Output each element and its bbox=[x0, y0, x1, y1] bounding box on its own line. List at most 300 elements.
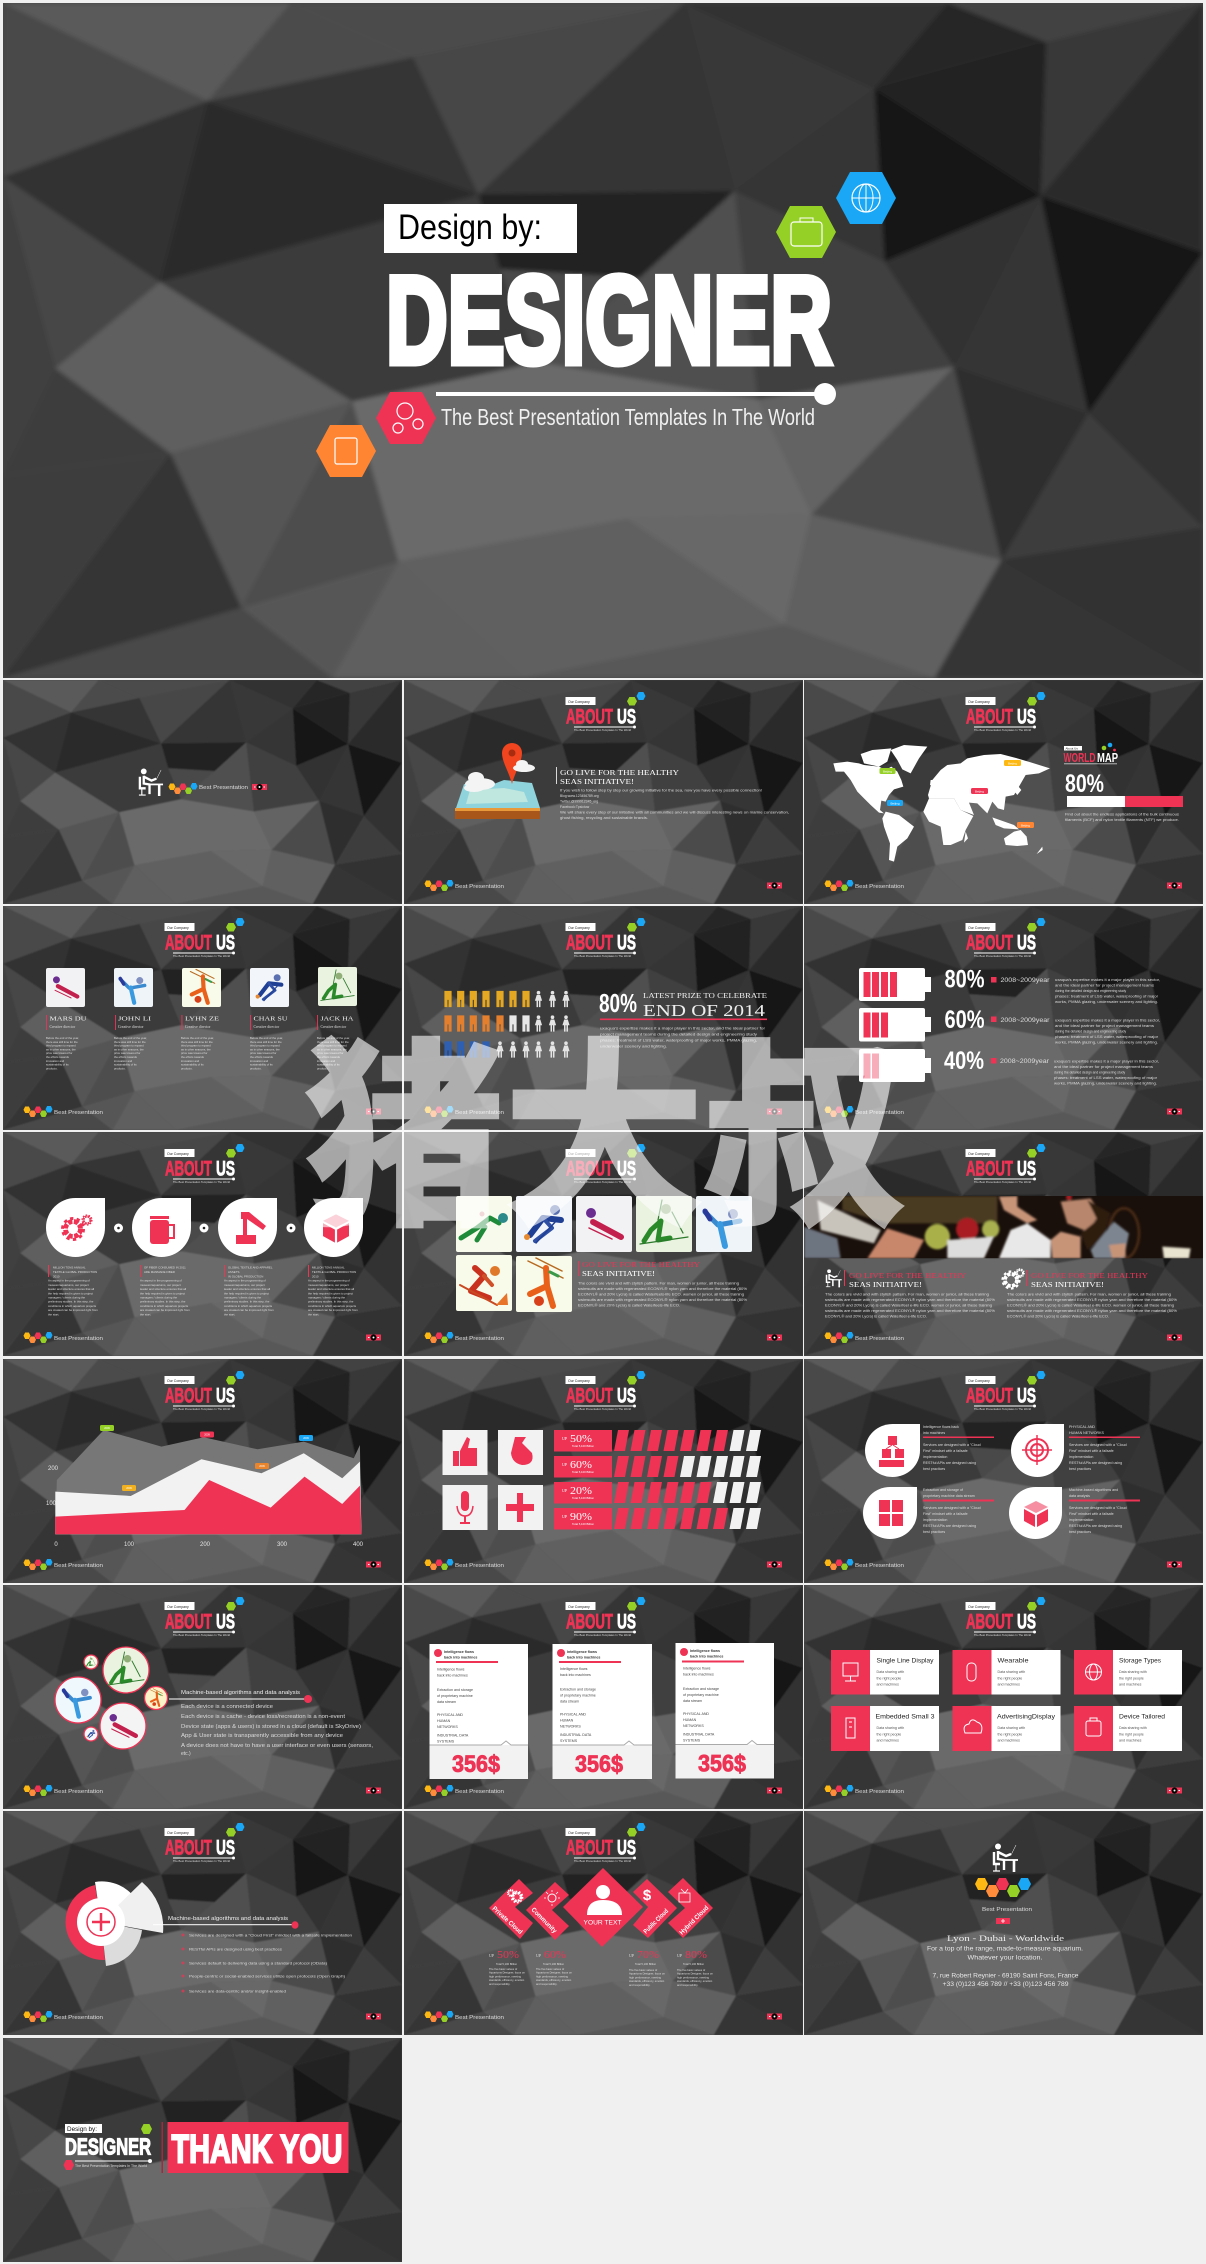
team bios: third program to expand bbox=[317, 1044, 347, 1048]
text: right block: ECONYL® and 20% Lycra) is called Waterfeel e-life ECO. bbox=[1007, 1314, 1109, 1318]
battery 80 bbox=[859, 968, 931, 1001]
text: prize description bbox=[600, 1026, 766, 1048]
card backgrounds bbox=[831, 1650, 1182, 1751]
header: about us: ABOUT bbox=[966, 1158, 1013, 1180]
footer brand: Best Presentation bbox=[855, 884, 904, 890]
stat descriptions: and responsibility. bbox=[629, 1983, 651, 1987]
text blocks: RESTful APIs are designed using bbox=[1069, 1524, 1122, 1528]
footer badge bbox=[1167, 1334, 1182, 1340]
header: about us: The Best Presentation Templates In The World bbox=[173, 1634, 231, 1637]
chart markers: 2009 bbox=[104, 1427, 110, 1430]
header: about us bbox=[566, 692, 646, 732]
text columns: and the ideal partner for project management teams bbox=[1054, 1065, 1153, 1069]
slide: radial chart bbox=[3, 1811, 402, 2035]
team bios: as in other seasons, the bbox=[317, 1047, 347, 1051]
slider line bbox=[153, 1921, 298, 1929]
footer badge bbox=[767, 1562, 782, 1568]
text: tagline and address: +33 (0)123 456 789 // +33 (0)123 456 789 bbox=[942, 1981, 1069, 1988]
text columns: works, PMMA glazing, underwater scenery and lighting. bbox=[1055, 1000, 1158, 1004]
stats: 50% bbox=[497, 1949, 519, 1961]
pricing card 3: Extraction and storage bbox=[683, 1687, 719, 1691]
header: about us bbox=[566, 1597, 646, 1637]
header: about us: Our Company bbox=[968, 926, 990, 930]
slide: four leaf process: An aspect in the programming of bbox=[308, 1279, 350, 1283]
divider bbox=[162, 2122, 163, 2173]
chart axis labels: 100 bbox=[124, 1542, 135, 1548]
slide: six feature cards: Data sharing with bbox=[876, 1726, 904, 1730]
text columns: phases: treatment of LSS water, waterproofing of major bbox=[1055, 1035, 1159, 1039]
footer brand: Best Presentation bbox=[455, 1789, 504, 1795]
slide: four leaf process: conditions in which aquarium projects bbox=[224, 1304, 273, 1308]
chart markers: 2009 bbox=[204, 1434, 210, 1436]
stat descriptions: high performance, meeting bbox=[629, 1975, 661, 1979]
header: about us: US bbox=[617, 1610, 636, 1634]
footer badge bbox=[1167, 1108, 1182, 1114]
footer brand: Best Presentation bbox=[455, 1336, 504, 1342]
text: map note: Find out about the endless applications of the bulk continuous bbox=[1065, 812, 1179, 816]
slide: four leaf process: museum/aquariums, our project bbox=[48, 1283, 89, 1287]
text: go live block: GO LIVE FOR THE HEALTHY bbox=[582, 1261, 700, 1269]
stat descriptions: and responsibility. bbox=[536, 1982, 558, 1986]
bullet list bbox=[182, 1934, 352, 1994]
text: go live block: SEAS INITIATIVE! bbox=[582, 1270, 655, 1278]
slide: team: JACK HA bbox=[320, 1016, 354, 1022]
slide: pricing cards bbox=[404, 1585, 803, 1809]
footer brand: Best Presentation bbox=[54, 1789, 103, 1795]
chart axis labels: 100 bbox=[46, 1501, 57, 1507]
pricing card 1: SYSTEMS bbox=[437, 1740, 455, 1744]
header: about us bbox=[164, 1823, 244, 1863]
text: list: A device does not have to have a user interface or even users (sensors, bbox=[181, 1743, 373, 1749]
team bios: the efforts towards bbox=[250, 1055, 274, 1059]
pricing card 3: Intelligence flows bbox=[690, 1649, 720, 1653]
map tags bbox=[880, 760, 1034, 828]
slide: four leaf process: 2010 bbox=[53, 1274, 60, 1278]
text: left block bbox=[825, 1270, 995, 1318]
slide: four service leaves bbox=[804, 1359, 1203, 1583]
header: about us: ABOUT bbox=[566, 1610, 613, 1634]
slide: bars and icons: Total 5,100 Billion bbox=[572, 1470, 594, 1474]
icons in chevrons bbox=[508, 1885, 690, 1915]
pricing card 3: back into machines bbox=[690, 1654, 723, 1658]
text: right block: GO LIVE FOR THE HEALTHY bbox=[1031, 1272, 1148, 1280]
text: go live block: We will share every step of our initiative with all communities and we will discuss interesting news on marine conservation, bbox=[560, 810, 789, 814]
text blocks: Extraction and storage of bbox=[923, 1488, 963, 1492]
team bios: there was still time for the bbox=[46, 1040, 78, 1044]
text: locations: Lyon - Dubai - Worldwide bbox=[947, 1934, 1065, 1943]
chart markers: 2009 bbox=[303, 1437, 309, 1440]
slide: bars and icons: UP bbox=[562, 1436, 568, 1441]
header: about us: Our Company bbox=[568, 1605, 590, 1609]
team bios: Before the end of the year, bbox=[114, 1036, 147, 1040]
team bios: Before the end of the year, bbox=[317, 1036, 350, 1040]
footer logo bbox=[24, 1785, 52, 1796]
footer badge bbox=[1167, 1788, 1182, 1794]
header: about us: The Best Presentation Templates In The World bbox=[574, 1634, 632, 1637]
slide: four leaf process: are created can be improved right from bbox=[140, 1308, 190, 1312]
header: about us: Our Company bbox=[167, 1379, 189, 1383]
header: about us: ABOUT bbox=[165, 932, 212, 954]
header: about us bbox=[566, 1371, 646, 1411]
footer brand: Best Presentation bbox=[455, 884, 504, 890]
footer logo bbox=[824, 1106, 854, 1117]
text blocks: implementation bbox=[1069, 1455, 1093, 1459]
icon: mug bbox=[150, 1216, 174, 1244]
slide: four leaf process: conditions in which aquarium projects bbox=[140, 1304, 189, 1308]
header: about us: ABOUT bbox=[165, 1158, 212, 1180]
pricing card 2 bbox=[552, 1644, 652, 1779]
pricing card 3: NETWORKS bbox=[683, 1724, 704, 1728]
text: go live block: ECONYL® and 20% Lycra) is called Waterfeels-life ECO. women or junior, all these training bbox=[578, 1292, 744, 1296]
slide: six feature cards: and machines bbox=[1119, 1682, 1142, 1686]
chart axis labels: 300 bbox=[277, 1542, 288, 1548]
header: about us: ABOUT bbox=[966, 1384, 1013, 1408]
header: about us: The Best Presentation Templates In The World bbox=[574, 729, 632, 732]
icon: windows bbox=[879, 1500, 903, 1526]
chart: people row blue bbox=[444, 1041, 570, 1058]
pricing card 2: PHYSICAL AND bbox=[560, 1712, 586, 1716]
bullet list: Services are designed with a "Cloud First" mindset with a failsafe implementation bbox=[189, 1934, 352, 1938]
pricing card 1: NETWORKS bbox=[437, 1725, 458, 1729]
slide: six feature cards: Data sharing with bbox=[1119, 1670, 1147, 1674]
footer logo bbox=[24, 1106, 52, 1117]
slide: six feature cards: and machines bbox=[998, 1738, 1020, 1742]
card text: Storage Types bbox=[1119, 1658, 1161, 1664]
slide: bars and icons: 60% bbox=[570, 1459, 592, 1471]
pricing card 1: Extraction and storage bbox=[437, 1688, 473, 1692]
slide: four leaf process: TEXTILE GLOBAL PRODUCTION bbox=[53, 1270, 97, 1274]
text blocks: proprietary machine data stream bbox=[923, 1494, 975, 1498]
footer brand: Best Presentation bbox=[455, 2015, 504, 2021]
photo: still life with woman bbox=[804, 1194, 1203, 1258]
text: go live block: swimsuits are made with regenerated ECONYL® nylon yarn and therefore the material (80% bbox=[578, 1298, 747, 1302]
header: about us bbox=[164, 918, 244, 958]
text: prize description: uxaqua's expertise makes it a major player in this sector, and the ideal partner for bbox=[600, 1026, 766, 1030]
header: about us bbox=[966, 1144, 1046, 1184]
text blocks: First" mindset with a failsafe bbox=[923, 1512, 968, 1516]
text: list: App & User state is transparently accessible from any device bbox=[181, 1733, 343, 1739]
slider and subtitle: The Best Presentation Templates In The World bbox=[75, 2164, 147, 2168]
footer badge bbox=[767, 1334, 782, 1340]
icon: orange notebook hexagon bbox=[316, 425, 376, 477]
sport circles bbox=[55, 1647, 168, 1749]
text columns: works, PMMA glazing, underwater scenery and lighting. bbox=[1055, 1040, 1158, 1044]
stats: 70% bbox=[637, 1949, 659, 1961]
footer logo bbox=[24, 1559, 52, 1570]
team bios: as in other seasons, the bbox=[46, 1047, 76, 1051]
team bios: products. bbox=[317, 1066, 329, 1070]
slide: six feature cards: the right people bbox=[998, 1676, 1022, 1680]
stat descriptions: and responsibility. bbox=[677, 1983, 699, 1987]
pricing card 3: Intelligence flows bbox=[683, 1666, 711, 1670]
team bios: price was lowered for bbox=[317, 1051, 343, 1055]
text: go live block bbox=[556, 767, 789, 820]
banner: thank you: THANK YOU bbox=[172, 2128, 342, 2172]
icon: arm bbox=[511, 1437, 533, 1465]
header: about us bbox=[566, 918, 646, 958]
header: about us: The Best Presentation Templates In The World bbox=[974, 729, 1032, 732]
year labels bbox=[991, 977, 996, 1064]
header: about us: ABOUT bbox=[566, 932, 613, 954]
text: right block: swimsuits are made with regenerated ECONYL® nylon yarn and therefore the material (80% bbox=[1007, 1298, 1177, 1302]
team bios: Before the end of the year, bbox=[181, 1036, 214, 1040]
header: about us: Our Company bbox=[968, 1605, 990, 1609]
stats: UP bbox=[629, 1953, 635, 1958]
text columns: during the detailed design and engineering study bbox=[1054, 1070, 1125, 1074]
pricing card 3: HUMAN bbox=[683, 1718, 697, 1722]
footer brand: Best Presentation bbox=[54, 1563, 103, 1569]
header: about us: US bbox=[617, 1836, 636, 1860]
footer badge bbox=[366, 2014, 381, 2020]
team bios: innovation and bbox=[114, 1059, 133, 1063]
slide: cloud diamonds bbox=[404, 1811, 803, 2035]
icon: green suitcase hexagon bbox=[776, 206, 836, 258]
slide: six feature cards: Data sharing with bbox=[876, 1670, 904, 1674]
text columns: works, PMMA glazing, underwater scenery and lighting. bbox=[1054, 1082, 1157, 1086]
chart: people row orange bbox=[444, 1015, 570, 1032]
watermark: 猪大叔 bbox=[304, 976, 904, 1266]
team bios: as in other seasons, the bbox=[181, 1047, 211, 1051]
text blocks: First" mindset with a failsafe bbox=[1069, 1449, 1114, 1453]
team bios: sustainability of its bbox=[114, 1063, 137, 1067]
illustration: map with pin bbox=[455, 743, 540, 819]
text: left block: swimsuits are made with regenerated ECONYL® nylon yarn and therefore the material (80% bbox=[825, 1298, 995, 1302]
team bios: third program to expand bbox=[250, 1044, 280, 1048]
text blocks: RESTful APIs are designed using bbox=[923, 1524, 976, 1528]
text: go live block: Twitter:@999912345_org bbox=[560, 800, 598, 804]
text: left block: ECONYL® and 20% Lycra) is called Waterfeel e-life ECO. women or junior, all these training bbox=[825, 1304, 992, 1308]
text: right block: swimsuits are made with regenerated ECONYL® nylon yarn and therefore the material (80% bbox=[1007, 1309, 1177, 1313]
card text bbox=[876, 1658, 1165, 1720]
footer brand: Best Presentation bbox=[54, 2015, 103, 2021]
icon: gears bbox=[62, 1215, 92, 1240]
header: about us: ABOUT bbox=[566, 1158, 613, 1180]
slide: team: Creative director bbox=[320, 1025, 347, 1029]
slide: four leaf process: MILLION TONS ANNUAL bbox=[53, 1266, 86, 1270]
chart: people row yellow bbox=[444, 991, 570, 1007]
slide: battery stats: 2008~2009year bbox=[1000, 977, 1050, 984]
text columns: uxaqua's expertise makes it a major player in this sector, bbox=[1054, 1060, 1159, 1064]
text blocks bbox=[923, 1425, 1127, 1534]
diagram labels bbox=[491, 1905, 710, 1936]
footer logo bbox=[24, 2011, 52, 2022]
label box: Design by: Design by: bbox=[398, 208, 542, 247]
team bios: products. bbox=[46, 1066, 58, 1070]
header: about us: ABOUT bbox=[566, 1384, 613, 1408]
chart axis labels bbox=[46, 1466, 364, 1548]
slide: four leaf process: leader and structure ensures that all bbox=[308, 1287, 354, 1291]
stats: 40% bbox=[944, 1047, 984, 1075]
header: about us: US bbox=[1017, 932, 1036, 954]
header: about us: US bbox=[617, 706, 636, 728]
label box: Design by: Design by: bbox=[67, 2127, 97, 2133]
footer logo bbox=[424, 2011, 454, 2022]
stat descriptions: Total 5,100 Billion bbox=[683, 1962, 705, 1966]
panel: cover slide bbox=[3, 3, 1203, 678]
text: go live block bbox=[578, 1261, 747, 1308]
header: about us: The Best Presentation Templates In The World bbox=[974, 1634, 1032, 1637]
title: DESIGNER: DESIGNER bbox=[386, 252, 832, 390]
slide: four leaf process bbox=[3, 1132, 402, 1356]
slide: four leaf process: An aspect in the programming of bbox=[140, 1279, 182, 1283]
team bios: sustainability of its bbox=[250, 1063, 273, 1067]
text blocks: RESTful APIs are designed using bbox=[923, 1461, 976, 1465]
footer logo bbox=[824, 1785, 854, 1796]
text: go live block: The colors are vivid and with stylish pattern. For man, women or junior, all these training bbox=[578, 1282, 739, 1286]
slider and subtitle bbox=[64, 2159, 152, 2170]
header: about us: The Best Presentation Templates In The World bbox=[173, 1860, 231, 1863]
icon: blocks bbox=[879, 1436, 904, 1467]
text blocks: implementation bbox=[1069, 1518, 1093, 1522]
slider line bbox=[169, 1695, 312, 1703]
header: about us: ABOUT bbox=[165, 1610, 212, 1634]
slide: team: CHAR SU bbox=[254, 1016, 288, 1022]
header: about us: The Best Presentation Templates In The World bbox=[574, 1860, 632, 1863]
stat descriptions: Aquariums Designer, focus on bbox=[629, 1972, 665, 1976]
text: tagline and address: Whatever your location. bbox=[968, 1954, 1043, 1962]
slide: four leaf process: GLOBAL TEXTILE AND APPAREL bbox=[228, 1266, 273, 1270]
stats: 80% bbox=[685, 1949, 707, 1961]
footer brand: Best Presentation bbox=[455, 1563, 504, 1569]
slide: four leaf process: museum/aquariums, our project bbox=[224, 1283, 265, 1287]
header: about us: Our Company bbox=[568, 926, 590, 930]
slide: team: Creative director bbox=[118, 1025, 144, 1029]
chart markers: 2009 bbox=[126, 1487, 132, 1490]
pricing card 1: of proprietary machine bbox=[437, 1694, 473, 1698]
slide: four leaf process: the start. bbox=[224, 1312, 235, 1316]
heading: world map bbox=[1064, 743, 1118, 765]
icon: person at desk bbox=[139, 769, 163, 796]
header: about us: Our Company bbox=[968, 700, 990, 704]
heading: world map: About Us bbox=[1066, 746, 1078, 750]
chart axis labels: 0 bbox=[54, 1542, 58, 1548]
footer brand: Best Presentation bbox=[54, 1110, 103, 1116]
banner: thank you bbox=[168, 2122, 348, 2173]
slide: four leaf process: MILLION TONS ANNUAL bbox=[312, 1266, 345, 1270]
text columns bbox=[1054, 978, 1160, 1086]
chart: radial segments bbox=[66, 1881, 163, 1966]
header: about us: US bbox=[216, 1158, 235, 1180]
text columns bbox=[48, 1265, 309, 1277]
slide: four leaf process: the help required is given to project bbox=[48, 1291, 93, 1295]
slider line with knob bbox=[436, 383, 836, 405]
text blocks: data analysis bbox=[1069, 1494, 1090, 1498]
battery 60 bbox=[859, 1008, 931, 1042]
text blocks: First" mindset with a failsafe bbox=[1069, 1512, 1114, 1516]
team bios: the efforts towards bbox=[46, 1055, 70, 1059]
slide: four leaf process: managers / clients during the bbox=[224, 1296, 262, 1300]
slide: four leaf process: leader and structure ensures that all bbox=[224, 1287, 270, 1291]
stat descriptions: standards, efficiency, emotion bbox=[677, 1979, 713, 1983]
header: about us bbox=[164, 1144, 244, 1184]
text columns: phases: treatment of LSS water, waterproofing of major bbox=[1054, 1076, 1158, 1080]
text: go live block: GO LIVE FOR THE HEALTHY bbox=[560, 769, 679, 777]
footer logo bbox=[824, 1559, 854, 1570]
text blocks: RESTful APIs are designed using bbox=[1069, 1461, 1122, 1465]
text blocks: implementation bbox=[923, 1455, 947, 1459]
map tags: Beijing bbox=[883, 769, 892, 773]
text blocks: best practices bbox=[923, 1530, 945, 1534]
icons in chevrons: $ bbox=[643, 1887, 652, 1904]
icon: blue globe hexagon bbox=[836, 172, 896, 224]
battery 40 bbox=[859, 1049, 931, 1082]
slide: six feature cards: and machines bbox=[1119, 1738, 1142, 1742]
text blocks: Services are designed with a "Cloud bbox=[1069, 1443, 1127, 1447]
slide: bars and icons bbox=[404, 1359, 803, 1583]
header: about us: Our Company bbox=[568, 1831, 590, 1835]
stats bbox=[944, 966, 984, 1075]
header: about us bbox=[966, 1371, 1046, 1411]
pricing card 1: 356$ bbox=[452, 1751, 501, 1778]
stat descriptions: The five basic values of bbox=[536, 1967, 564, 1971]
slide: four leaf process: preliminary studies. In this step, the bbox=[308, 1300, 354, 1304]
header: about us: The Best Presentation Templates In The World bbox=[173, 1181, 231, 1184]
team bios: sustainability of its bbox=[317, 1063, 340, 1067]
sport icon cards bbox=[456, 1196, 752, 1312]
icon: person at desk bbox=[826, 1269, 842, 1287]
slide: sport cards bbox=[404, 1132, 803, 1356]
header: about us: US bbox=[216, 1836, 235, 1860]
slide: battery stats: 2008~2009year bbox=[1000, 1017, 1050, 1024]
text: list bbox=[181, 1704, 373, 1757]
slide: four leaf process: An aspect in the programming of bbox=[48, 1279, 90, 1283]
diagram labels: YOUR TEXT bbox=[584, 1920, 622, 1926]
footer logo bbox=[424, 1332, 454, 1343]
team bios: there was still time for the bbox=[181, 1040, 213, 1044]
text blocks: Services are designed with a "Cloud bbox=[923, 1443, 981, 1447]
slide: four leaf process: preliminary studies. In this step, the bbox=[224, 1300, 270, 1304]
header: about us: US bbox=[1017, 1158, 1036, 1180]
slide: four leaf process: ARE MANMADE FIBER bbox=[144, 1270, 175, 1274]
bar rows labels bbox=[554, 1430, 612, 1530]
header: about us: Our Company bbox=[167, 1152, 189, 1156]
text: go live block: Facebook:Tpsictuw bbox=[560, 805, 590, 809]
text blocks: implementation bbox=[923, 1518, 947, 1522]
team bios: third program to expand bbox=[114, 1044, 144, 1048]
slide: six feature cards: and machines bbox=[876, 1682, 899, 1686]
header: about us: US bbox=[1017, 1610, 1036, 1634]
pricing card 1: data stream bbox=[437, 1700, 456, 1704]
card text: Wearable bbox=[998, 1658, 1029, 1664]
stats: 60% bbox=[944, 1006, 984, 1034]
slide: six feature cards: Data sharing with bbox=[1119, 1726, 1147, 1730]
footer logo bbox=[824, 1332, 854, 1343]
slide: four leaf process: the help required is given to project bbox=[308, 1291, 353, 1295]
red badge bbox=[252, 784, 267, 790]
slide: team bbox=[3, 906, 402, 1130]
slide: bars and icons: UP bbox=[562, 1488, 568, 1493]
slide: four leaf process: preliminary studies. In this step, the bbox=[140, 1300, 186, 1304]
diagram labels: Private Cloud bbox=[491, 1905, 524, 1936]
pricing card 3: PHYSICAL AND bbox=[683, 1712, 709, 1716]
slide: team: Creative director bbox=[185, 1025, 211, 1029]
chart markers bbox=[100, 1425, 313, 1491]
header: about us: ABOUT bbox=[566, 1836, 613, 1860]
text: list: Each device is a connected device bbox=[181, 1704, 273, 1710]
footer brand: Best Presentation bbox=[54, 1336, 103, 1342]
stat descriptions: Aquariums Designer, focus on bbox=[489, 1971, 525, 1975]
slide: four leaf process: the start. bbox=[140, 1312, 151, 1316]
text: tagline and address: 7, rue Robert Reynier - 69190 Saint Fons, France bbox=[932, 1972, 1079, 1980]
red dividers bbox=[923, 1436, 1140, 1502]
stat descriptions: The five basic values of bbox=[489, 1967, 517, 1971]
icon: green hexagon bbox=[141, 2124, 152, 2134]
card text: AdvertisingDisplay bbox=[997, 1714, 1055, 1720]
stat descriptions: Aquariums Designer, focus on bbox=[536, 1971, 572, 1975]
slide: six feature cards: the right people bbox=[1119, 1732, 1144, 1736]
bar rows stripes bbox=[614, 1430, 761, 1529]
chart axis labels: 200 bbox=[200, 1542, 211, 1548]
